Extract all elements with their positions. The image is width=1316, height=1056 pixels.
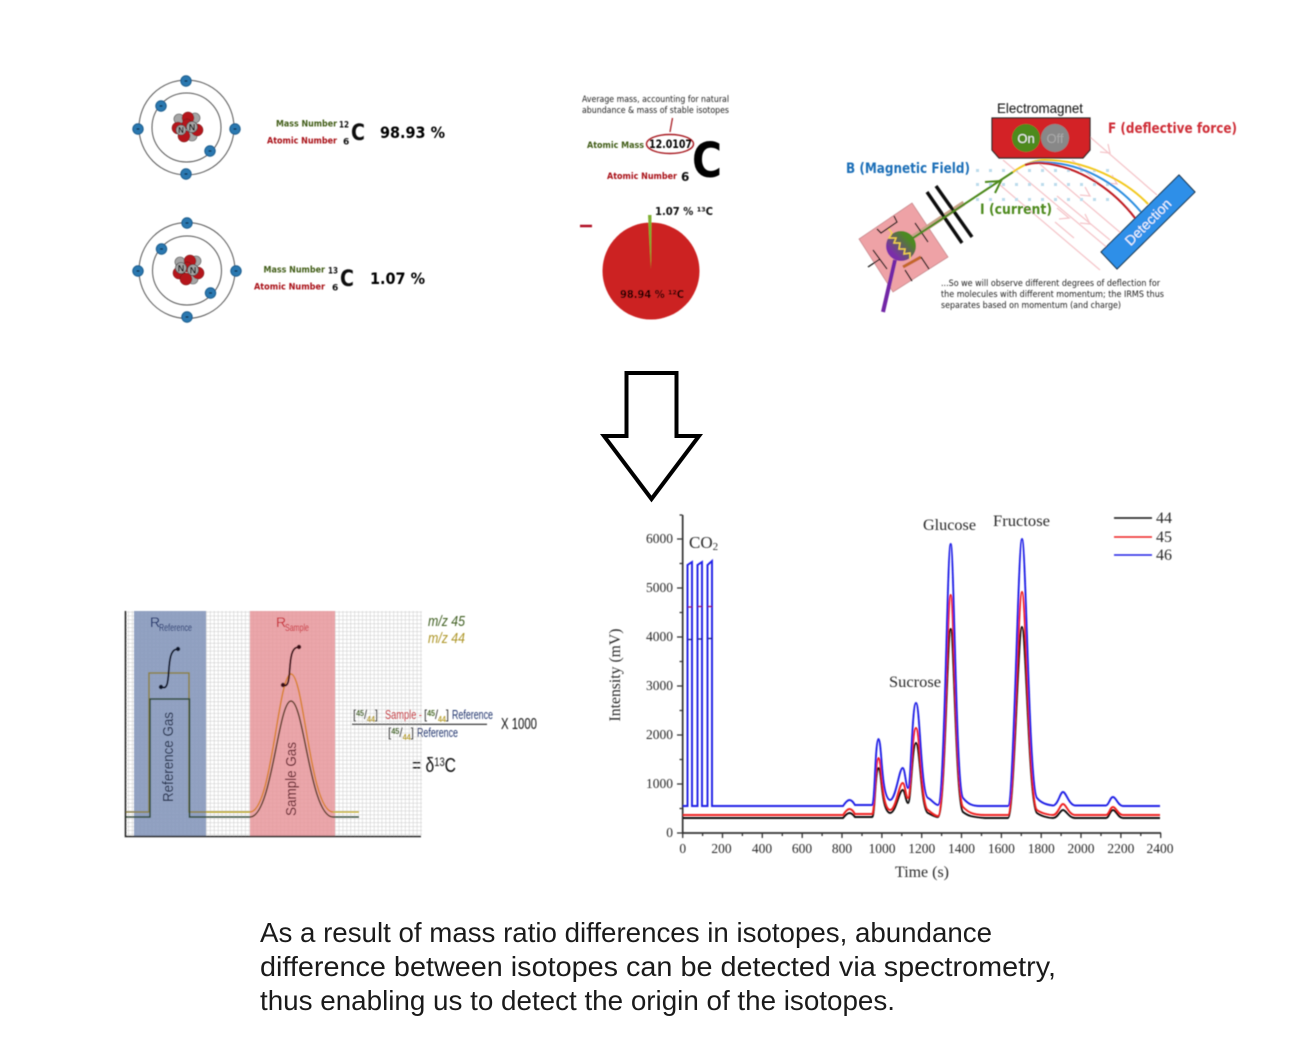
series: m/z 44: [683, 627, 1160, 818]
text: conclusion: [260, 917, 1056, 1016]
label: deflective force: F (deflective force): [1108, 121, 1237, 137]
grid and bands: [126, 611, 422, 836]
pie chart: isotope abundance: [602, 205, 713, 320]
axis title: time: Time (s): [895, 864, 949, 881]
label: element symbol: 6: [681, 170, 689, 184]
text: conclusion: As a result of mass ratio differences in isotopes, abundance: [260, 917, 992, 948]
band labels: Sample: [285, 622, 309, 634]
integral symbols: [159, 645, 301, 689]
axis title: intensity: Intensity (mV): [607, 628, 624, 722]
y-axis labels: 4000: [646, 629, 673, 644]
band labels: R: [276, 614, 286, 630]
band labels: Reference: [159, 622, 192, 634]
x-axis labels: 1200: [908, 841, 935, 856]
formula: delta 13C: 44: [438, 715, 446, 724]
deflected ion paths: [1013, 160, 1148, 218]
caption: deflection note: [941, 279, 1164, 311]
panel: carbon-13 atom and label: [133, 218, 425, 322]
label: magnetic field: B (Magnetic Field): [846, 161, 970, 177]
legend: [1114, 510, 1172, 564]
detector: [1101, 175, 1195, 269]
legend: m/z: m/z 44: [428, 630, 465, 647]
formula: delta 13C: ]: [411, 726, 414, 740]
label: carbon-12 notation: [267, 120, 445, 148]
formula: delta 13C: Sample -: [385, 708, 422, 722]
legend: m/z: [428, 613, 466, 647]
detector: Detection: [1121, 195, 1175, 249]
electromagnet: Electromagnet: [997, 100, 1083, 116]
formula: delta 13C: /: [364, 708, 367, 722]
callout: atomic mass: Atomic Mass: [587, 141, 644, 151]
panel: magnetic deflection diagram: [846, 100, 1237, 312]
y-axis labels: 1000: [646, 776, 673, 791]
band labels: R: [150, 614, 160, 630]
diagram: carbon-12 atom: N: [189, 122, 195, 132]
formula: delta 13C: Reference: [417, 726, 458, 740]
text: average mass note: Average mass, accounting for natural: [582, 95, 729, 105]
peak labels: Fructose: [993, 513, 1050, 530]
caption: deflection note: the molecules with different momentum; the IRMS thus: [941, 290, 1164, 300]
formula: delta 13C: ]: [375, 708, 378, 722]
label: carbon-13 notation: 6: [332, 284, 338, 294]
formula: delta 13C: [352, 708, 537, 777]
formula: delta 13C: [: [353, 708, 356, 722]
label: carbon-12 notation: 12: [339, 120, 349, 130]
caption: deflection note: ...So we will observe different degrees of deflection for: [941, 279, 1160, 289]
formula: delta 13C: Reference: [452, 708, 493, 722]
peak labels: CO: [689, 533, 713, 552]
x-axis labels: 400: [752, 841, 772, 856]
formula: delta 13C: = δ: [412, 755, 440, 777]
axes and ticks: [677, 515, 1161, 838]
x-axis labels: 200: [711, 841, 732, 856]
label: reference gas: Reference Gas: [161, 712, 177, 802]
series: m/z 46: [683, 539, 1160, 806]
y-axis labels: 5000: [646, 580, 673, 595]
formula: delta 13C: [: [388, 726, 391, 740]
legend: m/z: m/z 45: [428, 613, 466, 630]
diagram: carbon-12 atom: [133, 76, 240, 179]
text: average mass note: abundance & mass of stable isotopes: [582, 106, 729, 116]
y-axis labels: 2000: [646, 727, 673, 742]
label: carbon-13 notation: Mass Number: [264, 266, 325, 276]
formula: delta 13C: C: [445, 755, 456, 777]
label: carbon-12 notation: C: [351, 121, 365, 146]
formula: delta 13C: 44: [367, 715, 375, 724]
formula: delta 13C: [: [424, 708, 427, 722]
magnetic field dots: [976, 169, 1109, 201]
peak labels: Glucose: [923, 517, 976, 534]
force field arrows: [1000, 137, 1157, 270]
y-axis labels: 6000: [646, 531, 673, 546]
diagram: carbon-12 atom: N: [178, 126, 184, 135]
ion source: [859, 186, 972, 312]
formula: delta 13C: ]: [446, 708, 449, 722]
text: conclusion: thus enabling us to detect the origin of the isotopes.: [260, 985, 895, 1016]
diagram: carbon-13 atom: N: [190, 266, 196, 276]
peak labels: Sucrose: [889, 674, 941, 691]
formula: delta 13C: 45: [427, 709, 435, 718]
formula: delta 13C: /: [435, 708, 438, 722]
label: element symbol: [607, 133, 722, 189]
x-axis labels: 1000: [868, 841, 896, 856]
label: element symbol: Atomic Number: [607, 172, 677, 182]
CO2 pulse marks: [688, 606, 712, 608]
peak labels: 2: [713, 541, 718, 553]
pie chart: isotope abundance: 1.07 % ¹³C: [655, 205, 713, 218]
panel: chromatogram chart: [607, 510, 1174, 881]
label: carbon-12 notation: 6: [343, 138, 349, 148]
diagram: carbon-13 atom: [133, 218, 241, 322]
band labels: [150, 614, 309, 634]
label: carbon-12 notation: Mass Number: [276, 120, 337, 130]
label: carbon-13 notation: 1.07 %: [370, 269, 425, 288]
peak labels: [689, 513, 1050, 691]
electromagnet: [992, 100, 1090, 158]
diagram: carbon-13 atom: N: [178, 264, 184, 274]
x-axis labels: [679, 841, 1174, 856]
y-axis labels: 3000: [646, 678, 673, 693]
label: carbon-13 notation: [254, 266, 425, 294]
formula: delta 13C: 13: [434, 755, 445, 769]
x-axis labels: 1600: [988, 841, 1015, 856]
formula: delta 13C: 45: [391, 727, 400, 736]
y-axis labels: 0: [666, 825, 673, 840]
panel: delta calculation chart: [126, 611, 537, 836]
x-axis labels: 2400: [1146, 841, 1174, 856]
x-axis labels: 0: [679, 841, 686, 856]
label: carbon-13 notation: C: [340, 267, 354, 292]
legend: 46: [1156, 547, 1172, 564]
label: carbon-13 notation: 13: [328, 266, 338, 276]
x-axis labels: 800: [832, 841, 852, 856]
trace: m/z 44: [126, 673, 359, 812]
x-axis labels: 1400: [948, 841, 975, 856]
panel: carbon-12 atom and label: [133, 76, 445, 179]
text: average mass note: [582, 95, 729, 116]
series: m/z 45: [683, 592, 1160, 816]
callout: atomic mass: 12.0107: [649, 137, 692, 151]
formula: delta 13C: /: [399, 726, 403, 740]
x-axis labels: 600: [792, 841, 812, 856]
y-axis labels: [646, 531, 673, 840]
panel: carbon element card and abundance pie: [580, 95, 729, 320]
label: sample gas: Sample Gas: [284, 742, 300, 816]
legend: 44: [1156, 510, 1172, 527]
legend: 45: [1156, 529, 1172, 546]
label: carbon-12 notation: 98.93 %: [380, 123, 445, 142]
electromagnet: On: [1017, 131, 1035, 146]
formula: delta 13C: 44: [403, 733, 411, 742]
x-axis labels: 1800: [1028, 841, 1055, 856]
caption: deflection note: separates based on momentum (and charge): [941, 301, 1121, 311]
x-axis labels: 2000: [1068, 841, 1095, 856]
trace: m/z 45: [126, 699, 359, 817]
x-axis labels: 2200: [1107, 841, 1135, 856]
formula: delta 13C: 45: [356, 709, 364, 718]
text: conclusion: difference between isotopes can be detected via spectrometry,: [260, 951, 1056, 982]
label: current: I (current): [980, 202, 1052, 218]
ion beam and arrow: [913, 172, 1013, 238]
label: carbon-12 notation: Atomic Number: [267, 136, 337, 146]
callout: atomic mass: [587, 118, 694, 154]
arrow: big down arrow: [604, 373, 699, 499]
electromagnet: Off: [1046, 131, 1064, 146]
formula: delta 13C: X 1000: [501, 716, 537, 733]
label: carbon-13 notation: Atomic Number: [254, 282, 326, 292]
label: element symbol: C: [692, 133, 722, 189]
pie chart: isotope abundance: 98.94 % ¹²C: [620, 288, 684, 301]
